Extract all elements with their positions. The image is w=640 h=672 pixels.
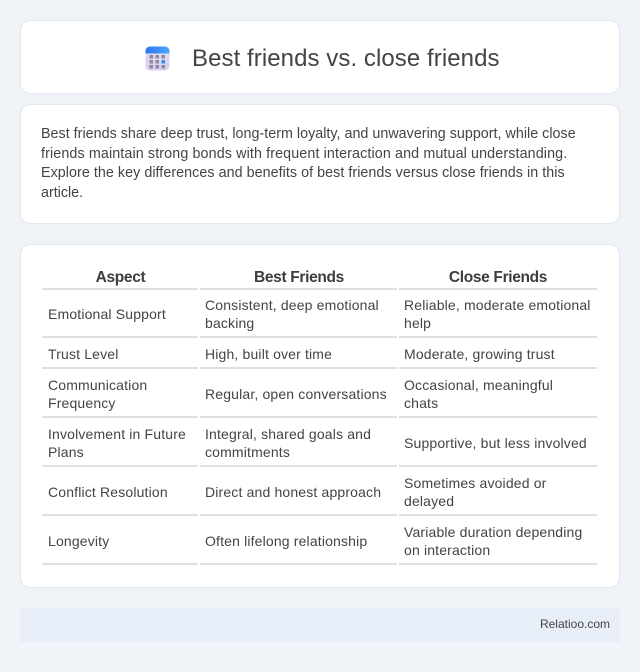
comparison table: backing xyxy=(205,315,254,331)
row: Involvement in Future Plans: Involvement in Future xyxy=(48,426,186,442)
row: Conflict Resolution: Conflict Resolution xyxy=(48,484,168,500)
comparison table: commitments xyxy=(205,444,290,460)
row: Involvement in Future Plans: Plans xyxy=(48,444,84,460)
comparison table: Often lifelong relationship xyxy=(205,533,367,549)
header: Best Friends: Best Friends xyxy=(254,269,344,286)
row: Longevity: Longevity xyxy=(48,533,109,549)
row: Emotional Support: Emotional Support xyxy=(48,306,166,322)
title: Best friends vs. close friends xyxy=(192,45,500,72)
table card xyxy=(20,244,620,588)
row: Involvement in Future Plans xyxy=(48,426,186,460)
comparison table: Integral, shared goals and xyxy=(205,426,371,442)
comparison table: Supportive, but less involved xyxy=(404,435,587,451)
intro text: Explore the key differences and benefits of best friends versus close friends in this xyxy=(41,165,565,181)
comparison table: Moderate, growing trust xyxy=(404,346,555,362)
footer bar xyxy=(20,608,620,642)
row: Trust Level: Trust Level xyxy=(48,346,118,362)
title card xyxy=(20,20,620,94)
footer text: Relatioo.com xyxy=(540,617,610,631)
comparison table xyxy=(42,269,597,565)
row: Communication Frequency: Frequency xyxy=(48,395,116,411)
intro text: friends maintain strong bonds with frequent interaction and mutual understanding. xyxy=(41,146,567,162)
comparison table: Sometimes avoided or xyxy=(404,475,546,491)
comparison table: on interaction xyxy=(404,542,490,558)
comparison table: High, built over time xyxy=(205,346,332,362)
header: Close Friends: Close Friends xyxy=(449,269,547,286)
intro text: Best friends share deep trust, long-term loyalty, and unwavering support, while close xyxy=(41,126,576,142)
comparison table: Variable duration depending xyxy=(404,524,582,540)
intro card xyxy=(20,104,620,224)
comparison table: Direct and honest approach xyxy=(205,484,381,500)
intro text: article. xyxy=(41,184,83,200)
comparison table: help xyxy=(404,315,431,331)
comparison table: Occasional, meaningful xyxy=(404,377,553,393)
comparison table: chats xyxy=(404,395,438,411)
comparison table: delayed xyxy=(404,493,454,509)
intro text xyxy=(41,126,576,200)
comparison table: Consistent, deep emotional xyxy=(205,297,379,313)
header: Aspect: Aspect xyxy=(96,269,145,286)
row: Communication Frequency xyxy=(48,377,147,411)
icon: calendar xyxy=(146,46,170,70)
comparison table: Regular, open conversations xyxy=(205,386,387,402)
row: Communication Frequency: Communication xyxy=(48,377,147,393)
comparison table: Reliable, moderate emotional xyxy=(404,297,591,313)
